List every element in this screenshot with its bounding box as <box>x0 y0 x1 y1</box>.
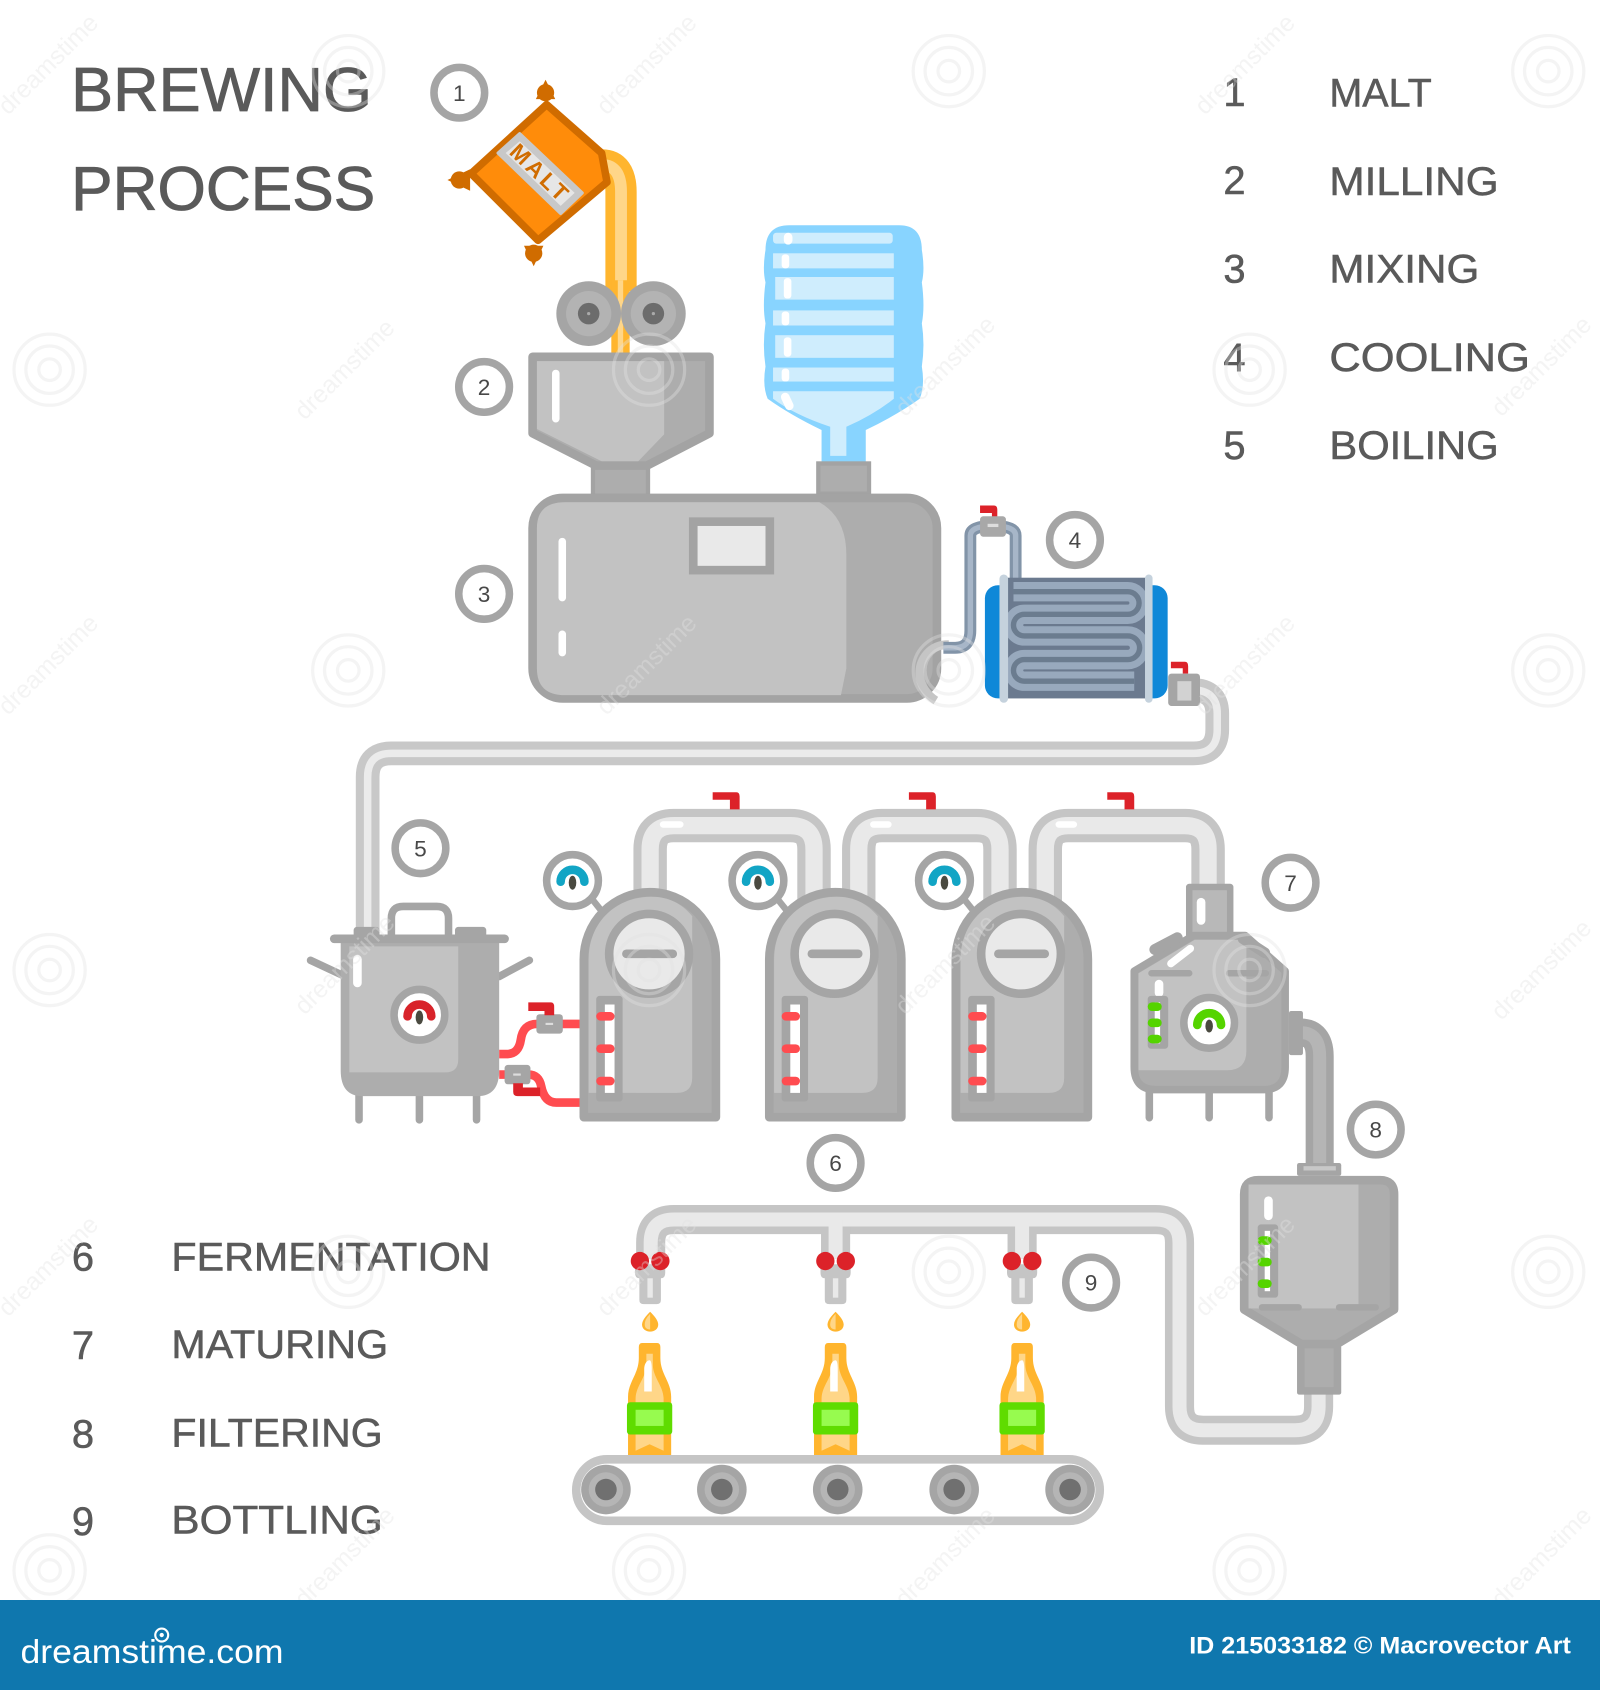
step badge numbers: 6 <box>829 1151 842 1176</box>
title: PROCESS <box>71 154 375 224</box>
watermark: dreamstime <box>1487 311 1597 422</box>
legend: steps 1 to 5: COOLING <box>1329 336 1530 380</box>
red taps on fermenter pipes <box>713 792 1134 809</box>
legend: steps 1 to 5: MIXING <box>1329 247 1479 291</box>
red pipes with valves <box>499 1002 580 1103</box>
tank outlet elbow <box>920 645 949 701</box>
legend: steps 6 to 9: 7 <box>72 1324 94 1368</box>
watermark: dreamstime <box>290 909 400 1020</box>
step badge numbers: 5 <box>414 836 427 861</box>
legend: steps 1 to 5 <box>1223 71 1530 468</box>
fermentation tank 1 <box>547 855 716 1117</box>
footer banner <box>0 1600 1600 1690</box>
conveyor belt <box>576 1459 1100 1521</box>
footer banner: ID 215033182 © Macrovector Art <box>1189 1633 1571 1659</box>
maturing tank <box>1134 887 1285 1118</box>
legend: steps 6 to 9 <box>72 1236 491 1544</box>
cooler top valve <box>980 505 1006 537</box>
malt sack <box>447 80 607 266</box>
legend: steps 6 to 9: 6 <box>72 1236 94 1280</box>
legend: steps 6 to 9: FILTERING <box>171 1411 383 1455</box>
legend: steps 1 to 5: 3 <box>1223 247 1246 291</box>
legend: steps 6 to 9: 9 <box>72 1500 94 1544</box>
filling nozzle 2 <box>816 1252 855 1332</box>
pipe to filter <box>1289 1011 1320 1166</box>
legend: steps 1 to 5: MILLING <box>1329 160 1499 204</box>
fermentation tank 3 <box>919 855 1088 1117</box>
step badge numbers: 7 <box>1284 871 1297 896</box>
bottling pipe <box>651 1220 1319 1430</box>
watermark: dreamstime <box>1487 915 1597 1025</box>
footer banner: dreamstime.com <box>20 1634 284 1671</box>
watermark: dreamstime <box>1190 9 1301 120</box>
step badge numbers: 3 <box>478 582 490 607</box>
hopper <box>533 357 709 496</box>
legend: steps 6 to 9: 8 <box>72 1412 94 1456</box>
legend: steps 1 to 5: BOILING <box>1329 424 1499 468</box>
boiler <box>311 906 529 1120</box>
milling rollers <box>556 281 686 346</box>
beer bottle 2 <box>813 1343 858 1455</box>
wort pipe <box>368 690 1217 933</box>
mixing tank <box>533 498 937 698</box>
step badge numbers: 4 <box>1069 528 1081 553</box>
watermark: dreamstime <box>890 311 1001 422</box>
beer bottle 1 <box>627 1343 672 1455</box>
legend: steps 1 to 5: 2 <box>1223 159 1246 203</box>
legend: steps 1 to 5: MALT <box>1329 72 1432 116</box>
legend: steps 1 to 5: 1 <box>1223 71 1246 115</box>
step badge numbers: 1 <box>453 81 466 106</box>
watermark: dreamstime <box>890 1502 1001 1613</box>
step badge numbers <box>414 81 1382 1296</box>
watermark: dreamstime <box>1190 1211 1301 1322</box>
cooler feed pipe <box>943 526 1016 648</box>
watermark: dreamstime <box>290 314 400 425</box>
cooler <box>985 574 1168 703</box>
watermark: dreamstime <box>1190 610 1301 720</box>
legend: steps 6 to 9: BOTTLING <box>171 1499 383 1543</box>
watermark: dreamstime <box>592 1211 702 1322</box>
filling nozzle 1 <box>631 1252 670 1332</box>
water bottle <box>764 225 923 494</box>
legend: steps 1 to 5: 4 <box>1223 336 1246 380</box>
watermark: dreamstime <box>890 909 1001 1020</box>
step badge numbers: 2 <box>478 375 490 400</box>
filling nozzle 3 <box>1003 1252 1042 1332</box>
watermark: dreamstime <box>592 9 702 120</box>
step badge numbers: 8 <box>1369 1118 1382 1143</box>
watermark: dreamstime <box>592 610 702 720</box>
legend: steps 6 to 9: MATURING <box>171 1323 388 1367</box>
watermark: dreamstime <box>290 1502 400 1613</box>
fermenter connecting pipes <box>650 825 1208 911</box>
legend: steps 6 to 9: FERMENTATION <box>171 1236 491 1280</box>
cooler outlet valve <box>1168 662 1200 706</box>
beer bottle 3 <box>999 1343 1045 1455</box>
step badges <box>395 67 1401 1308</box>
title: BREWING <box>71 55 372 125</box>
malt sack: MALT <box>505 139 575 208</box>
legend: steps 1 to 5: 5 <box>1223 424 1246 468</box>
malt stream <box>602 165 621 354</box>
fermentation tank 2 <box>732 855 901 1117</box>
watermark: dreamstime <box>1487 1502 1597 1613</box>
step badge numbers: 9 <box>1085 1271 1097 1296</box>
filter <box>1244 1163 1394 1395</box>
title <box>71 55 375 224</box>
